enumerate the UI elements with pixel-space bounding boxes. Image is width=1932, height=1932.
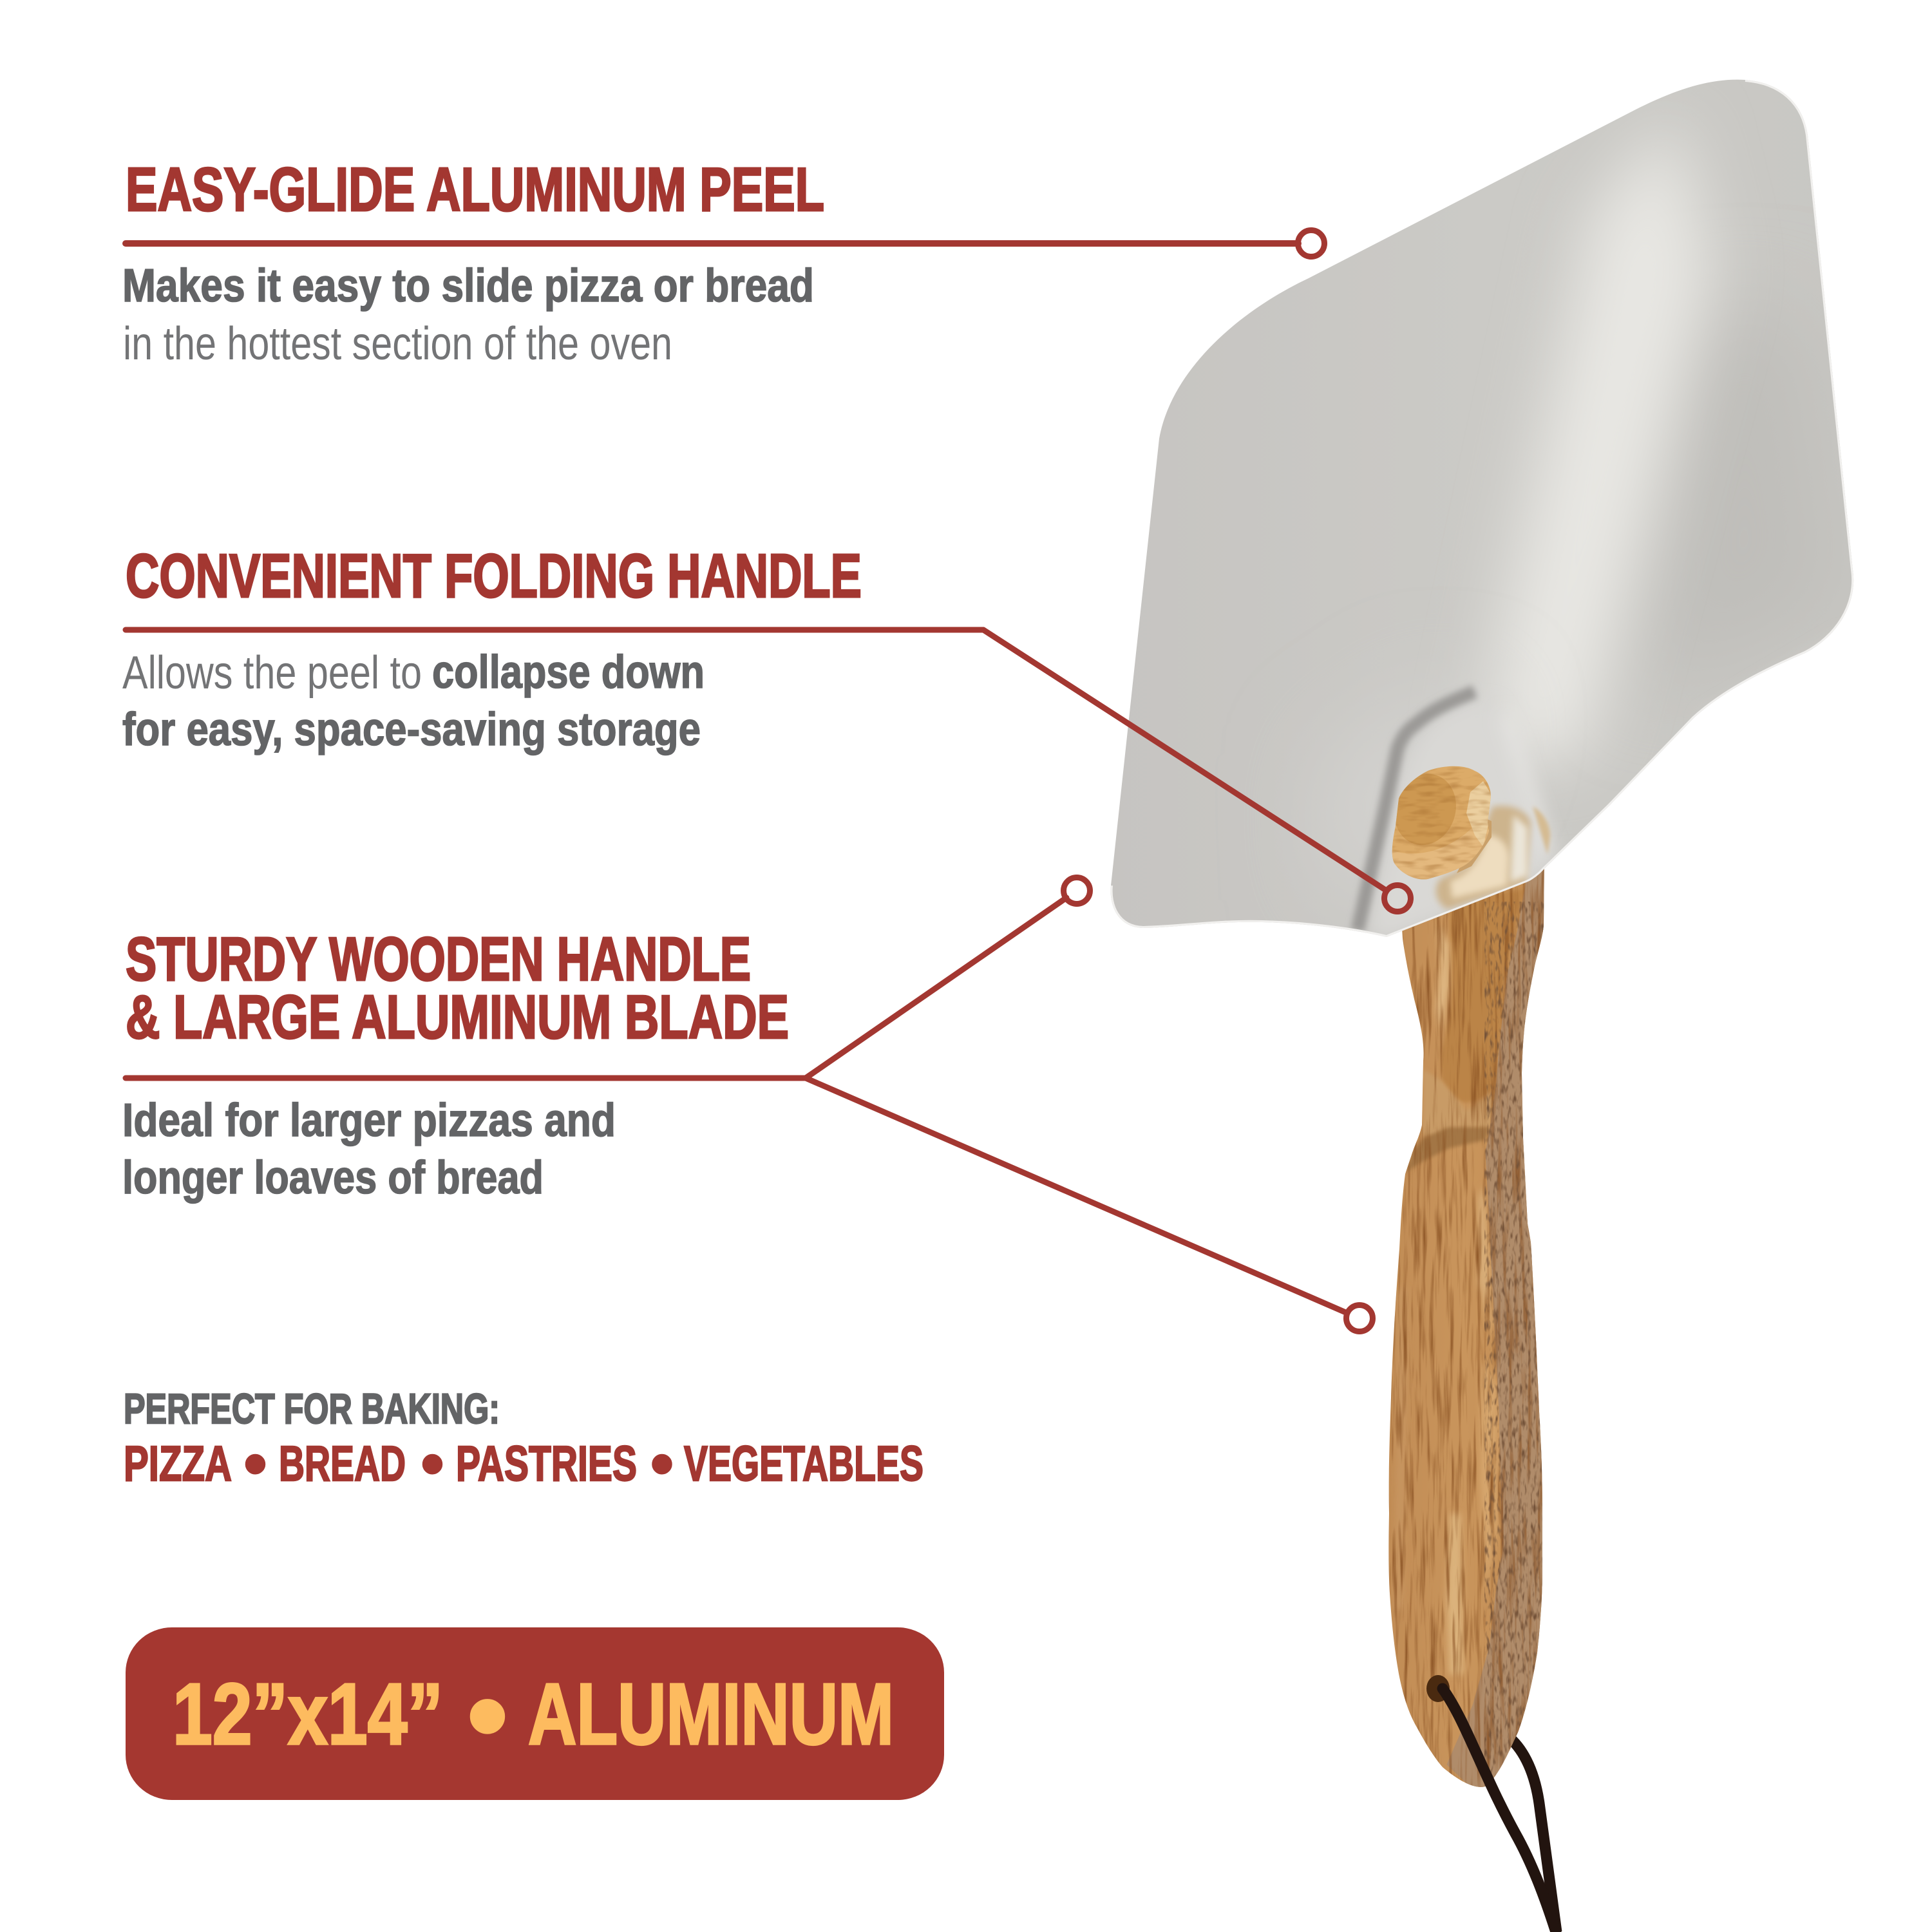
description text: Makes it easy to slide pizza or bread (122, 260, 814, 312)
knob reflection (1436, 806, 1550, 909)
heading: sturdy wooden handle and large aluminum blade (126, 925, 789, 1052)
description text (122, 260, 814, 370)
badge text: 12”x14” (173, 1665, 443, 1763)
handle crest under the recess (1423, 1069, 1495, 1137)
leader line to blade edge (126, 231, 1324, 256)
forked leader lines (126, 877, 1373, 1332)
badge background (126, 1627, 944, 1800)
list: baked foods (124, 1424, 923, 1503)
cord: rear strand (1507, 1736, 1557, 1932)
label: perfect for baking: PERFECT FOR BAKING: (124, 1385, 500, 1432)
badge text: ALUMINUM (528, 1665, 894, 1763)
badge text: • (466, 1647, 509, 1783)
description text: collapse down (432, 647, 705, 698)
list: baked foods: PASTRIES (456, 1436, 637, 1492)
callout: convenient folding handle (122, 542, 1410, 912)
blade reflections (1320, 116, 1855, 902)
callout: easy-glide aluminum peel (122, 155, 1324, 370)
list: baked foods: PIZZA (124, 1436, 232, 1492)
cord: front strand through the hole (1443, 1689, 1556, 1932)
heading: sturdy wooden handle and large aluminum blade: STURDY WOODEN HANDLE (126, 925, 751, 994)
list: baked foods: • (243, 1424, 268, 1503)
heading: easy-glide aluminum peel: EASY-GLIDE ALUMINUM PEEL (126, 155, 824, 224)
description text: longer loaves of bread (122, 1152, 544, 1204)
wooden handle (1388, 869, 1544, 1787)
handle dark band at the neck (1406, 1127, 1490, 1172)
product: pizza peel with folding handle (1095, 64, 1868, 1932)
blade pivot recess (1358, 692, 1555, 939)
list: baked foods: • (420, 1424, 445, 1503)
badge: size and material (126, 1627, 944, 1800)
heading: sturdy wooden handle and large aluminum blade: & LARGE ALUMINUM BLADE (126, 983, 789, 1052)
callout: sturdy wooden handle and large aluminum blade (122, 877, 1373, 1332)
description text: in the hottest section of the oven (123, 318, 672, 370)
handle grain texture (1388, 869, 1544, 1787)
list: baked foods: VEGETABLES (684, 1436, 923, 1492)
badge text (173, 1647, 894, 1783)
description text: Ideal for larger pizzas and (122, 1095, 616, 1146)
blade edge highlight (1111, 80, 1853, 937)
description text: for easy, space-saving storage (122, 704, 701, 755)
handle side face: walnut (1446, 869, 1544, 1787)
description text (122, 1095, 616, 1204)
handle highlight strips (1395, 923, 1497, 1674)
knob stem (1457, 818, 1492, 873)
list: baked foods: • (650, 1424, 674, 1503)
leader line to pivot (126, 630, 1410, 912)
heading: convenient folding handle: CONVENIENT FOLDING HANDLE (126, 542, 862, 611)
description text (122, 647, 705, 755)
list: baked foods: BREAD (279, 1436, 406, 1492)
description text: Allows the peel to (122, 647, 422, 699)
block: perfect for baking (124, 1385, 923, 1503)
aluminum blade (1095, 64, 1868, 953)
handle recess: upper neck (1441, 889, 1526, 1103)
hole for cord (1426, 1675, 1450, 1702)
wooden knob (1385, 760, 1497, 886)
